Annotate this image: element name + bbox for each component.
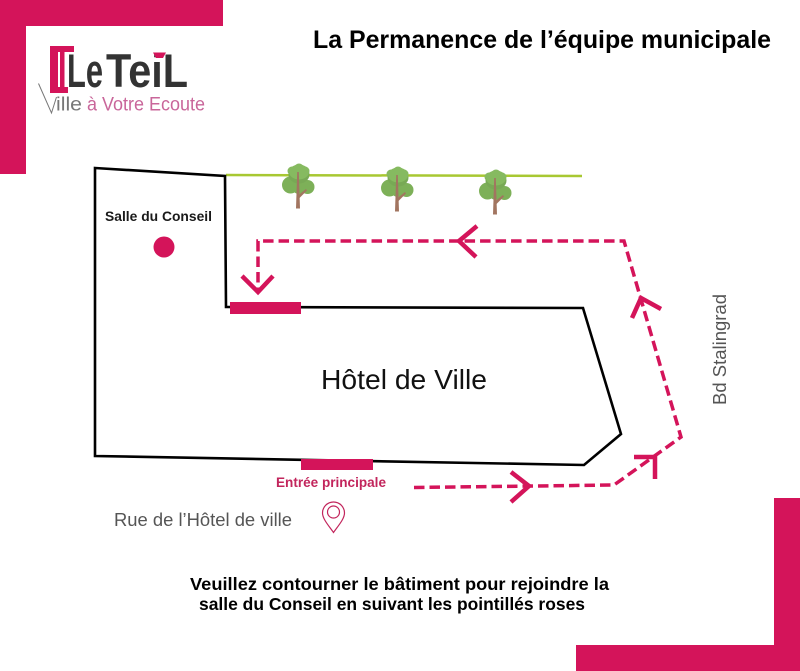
arrow: route down to door [242, 276, 273, 292]
icon: tree 2 [381, 166, 414, 212]
label: Entrée principale: Entrée principale [276, 475, 386, 490]
instructions: Veuillez contourner le bâtiment pour rejoindre la [190, 574, 609, 594]
logo accent on the i [153, 52, 166, 58]
logo: Le Teil, Ville à Votre Ecoute [38, 44, 205, 116]
icon: tree 3 [479, 170, 512, 214]
green street line [226, 175, 582, 176]
instructions [190, 574, 609, 614]
logo tagline [38, 84, 205, 116]
logo wordmark: Le: Le [67, 44, 103, 97]
arrow: route corner [634, 457, 655, 479]
label: Salle du Conseil: Salle du Conseil [105, 209, 212, 224]
label: Bd Stalingrad: Bd Stalingrad [709, 294, 730, 405]
marker: Salle du Conseil dot [154, 236, 174, 258]
icon: tree 1 [282, 164, 314, 208]
arrow: route start [511, 472, 529, 502]
logo monogram [50, 46, 74, 93]
title: La Permanence de l’équipe municipale [313, 26, 771, 54]
side door [230, 302, 301, 314]
instructions: salle du Conseil en suivant les pointillés roses [199, 594, 585, 614]
building outline: Hôtel de Ville [95, 168, 621, 465]
logo tagline: à Votre Ecoute [87, 94, 205, 116]
arrow: route north [632, 298, 661, 318]
arrow: route west [459, 226, 477, 257]
corner frame: top left [0, 0, 223, 174]
label: Hôtel de Ville: Hôtel de Ville [321, 363, 487, 395]
main entrance door [301, 459, 373, 470]
label: Rue de l'Hôtel de ville: Rue de l’Hôtel de ville [114, 509, 292, 530]
street line with trees [226, 164, 582, 214]
icon: location pin [322, 502, 344, 532]
logo wordmark: TeiL: TeiL [106, 44, 188, 97]
logo tagline: ille [56, 94, 82, 116]
dashed route [258, 241, 681, 488]
corner frame: bottom right [576, 498, 800, 671]
